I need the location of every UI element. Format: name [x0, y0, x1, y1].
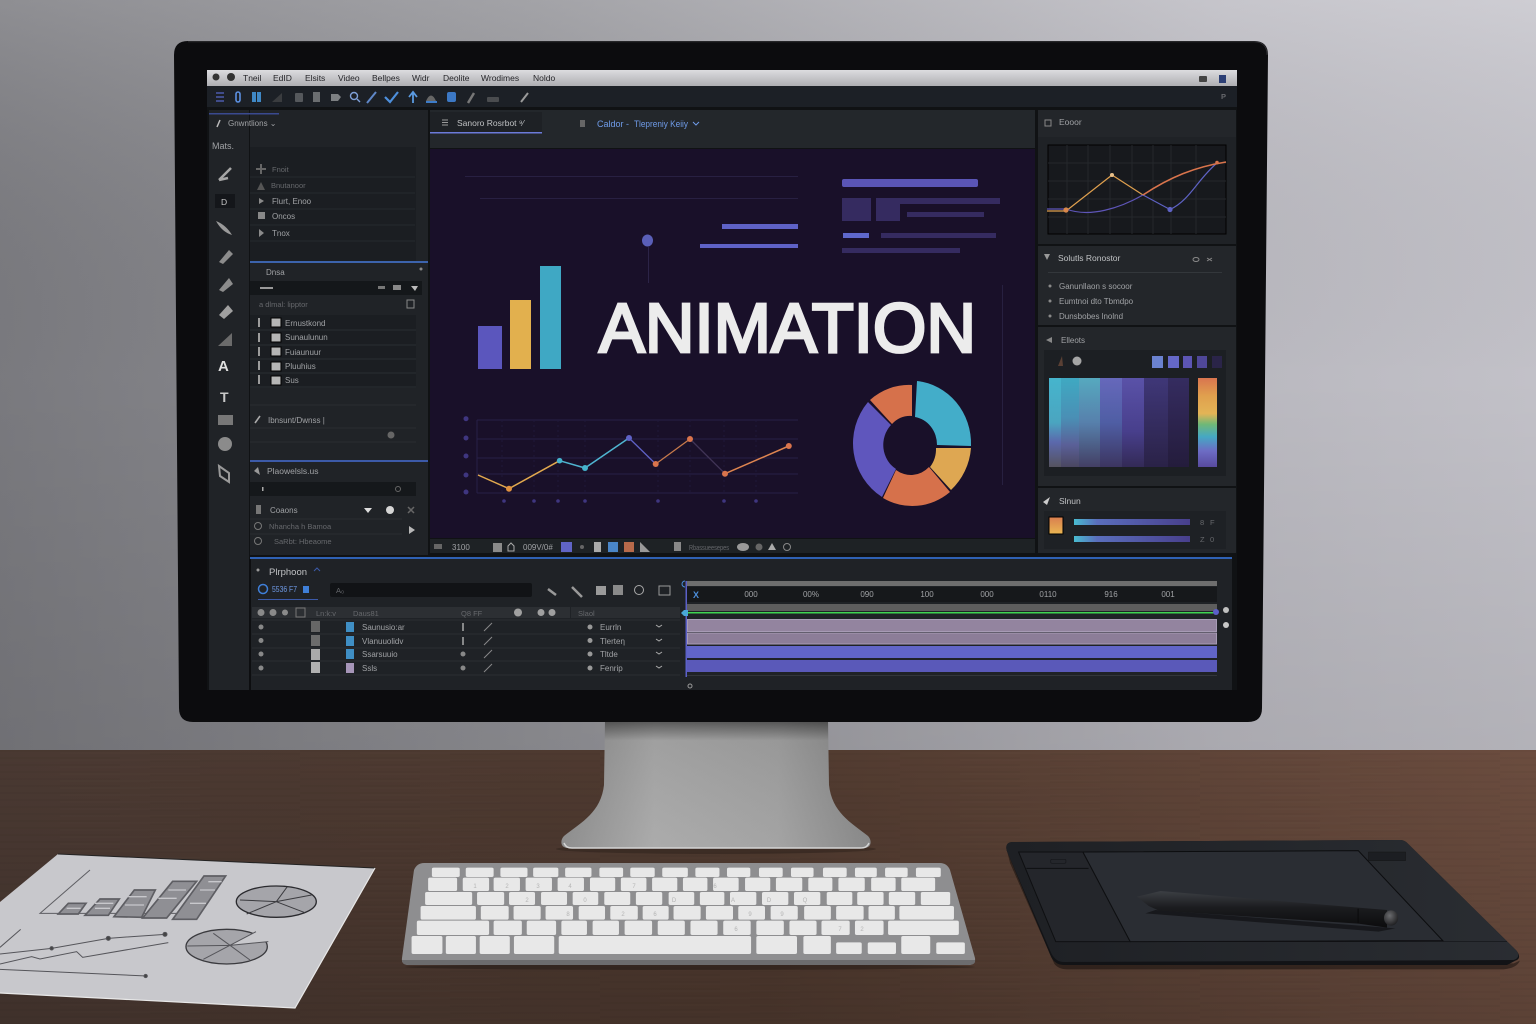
- left tool column: [209, 110, 279, 690]
- timeline column headers: Q8 FF: [461, 609, 483, 618]
- timeline header: 5536 F7: [272, 584, 297, 594]
- key legends: Q: [803, 898, 808, 904]
- left tool column: T: [220, 389, 229, 405]
- key legends: D: [672, 898, 677, 904]
- left panel: layers: [250, 110, 428, 555]
- timeline ruler: 00%: [803, 590, 819, 599]
- key legends: A: [731, 898, 735, 904]
- keyboard: [402, 863, 975, 970]
- software menu bar: Video: [338, 73, 360, 83]
- software menu bar: Bellpes: [372, 73, 400, 83]
- panel title: Gnwntlions ⌄: [228, 119, 276, 128]
- sub-panel: tool options: Bnutanoor: [271, 181, 306, 190]
- software menu bar: EdID: [273, 73, 292, 83]
- sub-panel: properties: SaRbt: Hbeaome: [274, 537, 332, 546]
- key legends: 2: [525, 898, 529, 904]
- sub-panel: tool options: Tnox: [272, 229, 290, 238]
- timeline layer rows: Eurrln: [600, 623, 621, 632]
- timeline ruler: [687, 581, 1217, 602]
- drawing tablet with stylus: [1006, 840, 1520, 969]
- software menu bar: Elsits: [305, 73, 325, 83]
- bar chart: [478, 266, 561, 369]
- paper bar sketch: [40, 870, 226, 919]
- key legends: D: [767, 898, 772, 904]
- paper pie sketches: [186, 886, 316, 964]
- timeline header: Plrphoon: [269, 567, 307, 578]
- sub-panel: layer list: a dlmal: lipptor: [259, 300, 308, 309]
- timeline tracks: [687, 604, 1217, 676]
- keyboard row 5: [417, 921, 959, 935]
- key legends: 1: [473, 884, 477, 890]
- sub-panel: layer list: Sunaulunun: [285, 333, 328, 342]
- software toolbar: [207, 86, 1237, 107]
- wooden desk: [0, 750, 1536, 1024]
- key legends: 7: [838, 927, 842, 933]
- sub-panel: tool options: Fnoit: [272, 165, 290, 174]
- key legends: 2: [860, 927, 864, 933]
- donut chart: [853, 381, 971, 506]
- timeline layer rows: Fenrip: [600, 664, 623, 673]
- right panel: solution parameters: Dunsbobes lnolnd: [1059, 312, 1123, 321]
- sub-panel: layer list: Dnsa: [266, 268, 285, 277]
- viewer status bar: [430, 539, 1035, 553]
- software menu bar: Noldo: [533, 73, 555, 83]
- left tool column: A: [218, 358, 229, 375]
- sub-panel: layer list: [250, 268, 422, 442]
- software menu bar: Wrodimes: [481, 73, 519, 83]
- monitor bezel: [174, 41, 1268, 722]
- right panel: sliders: Slnun: [1059, 496, 1081, 506]
- right panel: sliders: 8: [1200, 518, 1204, 527]
- timeline column headers: Slaol: [578, 609, 595, 618]
- sub-panel: tool options: Oncos: [272, 212, 295, 221]
- software toolbar: P: [1221, 92, 1226, 101]
- timeline ruler: 0110: [1039, 590, 1057, 599]
- key legends: 0: [583, 898, 587, 904]
- title: ANIMATION: [599, 289, 976, 367]
- timeline layer rows: Tltde: [600, 650, 618, 659]
- stylus: [1137, 891, 1398, 932]
- keyboard row 2: [428, 878, 935, 891]
- timeline column headers: Daus81: [353, 609, 379, 618]
- right panel: effects color picker: [1038, 327, 1236, 486]
- right panel: sliders: [1038, 488, 1236, 553]
- timeline column headers: [252, 607, 680, 618]
- sub-panel: properties: [250, 466, 416, 546]
- timeline layer rows: Vlanuuolidv: [362, 637, 403, 646]
- timeline ruler: X: [693, 590, 699, 600]
- sketch paper with charts: [0, 854, 375, 1008]
- right panel: sliders: F: [1210, 518, 1215, 527]
- center viewer tab bar: Caldor -: [597, 119, 629, 129]
- tablet active area: [1083, 851, 1443, 942]
- sub-panel: layer list: Pluuhius: [285, 362, 316, 371]
- wall background: [0, 0, 1536, 752]
- key legends: 2: [621, 912, 625, 918]
- sub-panel: layer list: Ernustkond: [285, 319, 325, 328]
- timeline layer rows: Ssarsuuio: [362, 650, 398, 659]
- timeline ruler: 000: [744, 590, 758, 599]
- keyboard row 1: [432, 868, 941, 877]
- timeline ruler: 001: [1161, 590, 1175, 599]
- software menu bar: Tneil: [243, 73, 262, 83]
- sub-panel: layer list: Sus: [285, 376, 299, 385]
- key legends: 4: [568, 884, 572, 890]
- key legends: 3: [536, 884, 540, 890]
- key legends: 6: [713, 884, 717, 890]
- timeline layer rows: Saunusio:ar: [362, 623, 405, 632]
- key legends: 7: [632, 884, 636, 890]
- keyboard row 4: [421, 906, 954, 920]
- timeline ruler: 090: [860, 590, 874, 599]
- line chart: [464, 416, 798, 503]
- right panel: effects color picker: Elleots: [1061, 336, 1085, 345]
- right panel: graph editor: [1038, 110, 1236, 244]
- paper line sketch: [0, 929, 168, 978]
- right panel: solution parameters: Solutls Ronostor: [1058, 253, 1121, 263]
- animation canvas: [430, 149, 1035, 538]
- viewer status bar: 3100: [452, 543, 470, 552]
- software menu bar: [207, 70, 1237, 86]
- sub-panel: tool options: Flurt, Enoo: [272, 197, 312, 206]
- keyboard row 6: [412, 936, 965, 954]
- left tool column: Mats.: [212, 141, 234, 151]
- sub-panel: tool options: [250, 147, 416, 261]
- timeline layer rows: Tlerteη: [600, 637, 625, 646]
- right panel: solution parameters: Ganunllaon s socoor: [1059, 282, 1133, 291]
- sub-panel: layer list: Fuiaunuur: [285, 348, 321, 357]
- software menu bar: Widr: [412, 73, 430, 83]
- key legends: 8: [566, 912, 570, 918]
- spectrum bar: [1198, 378, 1217, 467]
- right panel: solution parameters: Eumtnoi dto Tbmdpo: [1059, 297, 1134, 306]
- timeline ruler: 916: [1104, 590, 1118, 599]
- key legends: 9: [748, 912, 752, 918]
- timeline layer rows: [252, 620, 680, 675]
- key legends: 2: [505, 884, 509, 890]
- viewer status bar: 009V/0#: [523, 543, 553, 552]
- placeholder layout block: [842, 179, 1000, 253]
- center viewer tab bar: Tlepreniy Keiiy: [634, 119, 688, 129]
- key legends: 6: [734, 927, 738, 933]
- right panel: sliders: 0: [1210, 535, 1214, 544]
- timeline panel: [249, 557, 1232, 690]
- left tool column: D: [221, 197, 227, 207]
- sub-panel: layer list: Ibnsunt/Dwnss |: [268, 416, 325, 425]
- timeline ruler: 100: [920, 590, 934, 599]
- sub-panel: properties: Plaowelsls.us: [267, 466, 318, 476]
- monitor stand: [556, 720, 876, 854]
- timeline ruler: 000: [980, 590, 994, 599]
- timeline header: [256, 567, 670, 600]
- key legends: 9: [780, 912, 784, 918]
- viewer status bar: Rbassueesepes: [689, 543, 729, 552]
- right panel: solution parameters: [1038, 246, 1236, 325]
- center viewer tab bar: [430, 110, 1035, 148]
- accent bars: [642, 224, 798, 283]
- sub-panel: properties: Nhancha h Bamoa: [269, 522, 332, 531]
- keyboard row 3: [425, 892, 950, 905]
- sub-panel: properties: Coaons: [270, 506, 298, 515]
- key legends: 6: [653, 912, 657, 918]
- timeline column headers: Ln:k:v: [316, 609, 336, 618]
- gradient swatch: [1049, 378, 1189, 467]
- software menu bar: Deolite: [443, 73, 470, 83]
- right panel: sliders: Z: [1200, 535, 1205, 544]
- timeline header: A₀: [336, 586, 344, 595]
- center viewer tab bar: Sanoro Rosrbot ⁹⁄: [457, 118, 526, 128]
- playhead: [681, 581, 1219, 677]
- timeline layer rows: Ssls: [362, 664, 377, 673]
- key legends: [473, 884, 864, 933]
- right panel: graph editor: Eooor: [1059, 117, 1082, 127]
